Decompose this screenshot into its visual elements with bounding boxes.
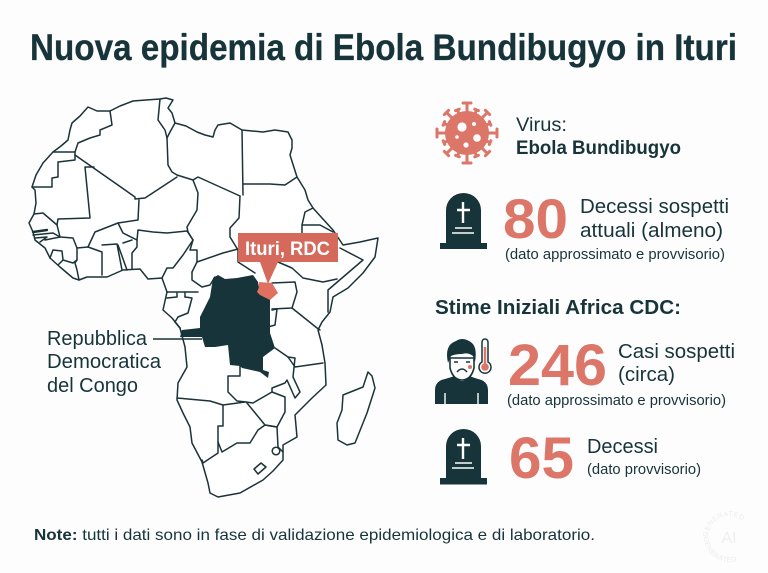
stat: 80 suspected deaths: (dato approssimato e provvisorio) xyxy=(505,247,725,263)
map: Ituri region highlighted xyxy=(257,282,278,300)
watermark: AI generated stamp: GENERATED xyxy=(704,511,744,536)
map: Africa outline and country borders xyxy=(29,98,378,497)
stat: 80 suspected deaths xyxy=(503,187,729,263)
map: Democratic Republic of Congo highlighted xyxy=(180,275,275,378)
heading: Africa CDC estimates: Stime Iniziali Africa CDC: xyxy=(435,297,681,319)
callout: Ituri, RDC: Ituri, RDC xyxy=(245,239,330,260)
stat: 65 deaths: Decessi xyxy=(587,436,658,458)
label: Repubblica Democratica del Congo: Democratica xyxy=(47,351,162,373)
icon: tombstone xyxy=(440,429,487,484)
text: virus name: Virus: xyxy=(516,115,567,136)
icon: virus xyxy=(437,103,497,163)
stat: 246 suspected cases: (circa) xyxy=(618,364,675,386)
watermark: AI generated stamp: GENERATED xyxy=(704,537,736,562)
text: virus name xyxy=(516,115,681,159)
panel: map of Africa xyxy=(29,98,378,497)
text: virus name: Ebola Bundibugyo xyxy=(516,138,681,159)
stat: 246 suspected cases: 246 xyxy=(508,333,607,398)
stat: 246 suspected cases: (dato approssimato e provvisorio) xyxy=(507,393,726,409)
footnote: Note: tutti i dati sono in fase di validazione epidemiologica e di laboratorio. xyxy=(34,527,595,544)
label: Repubblica Democratica del Congo: del Congo xyxy=(47,375,138,397)
stat: 65 deaths xyxy=(509,426,701,491)
stat: 246 suspected cases: Casi sospetti xyxy=(618,341,735,363)
stat: 65 deaths: (dato provvisorio) xyxy=(587,462,701,478)
stat: 80 suspected deaths: Decessi sospetti xyxy=(580,196,729,218)
label: Repubblica Democratica del Congo xyxy=(47,328,162,397)
stat: 65 deaths: 65 xyxy=(509,426,574,491)
watermark: AI generated stamp: AI xyxy=(721,530,737,547)
callout: Ituri, RDC xyxy=(238,233,338,284)
watermark: AI generated stamp xyxy=(704,511,744,562)
label: Repubblica Democratica del Congo: Repubblica xyxy=(47,328,148,350)
icon: tombstone xyxy=(440,193,487,249)
leader line to DRC xyxy=(153,338,202,340)
stat: 80 suspected deaths: 80 xyxy=(503,187,568,250)
icon: sick person with thermometer xyxy=(435,339,491,404)
stat: 246 suspected cases xyxy=(507,333,735,409)
stat: 80 suspected deaths: attuali (almeno) xyxy=(580,220,723,242)
